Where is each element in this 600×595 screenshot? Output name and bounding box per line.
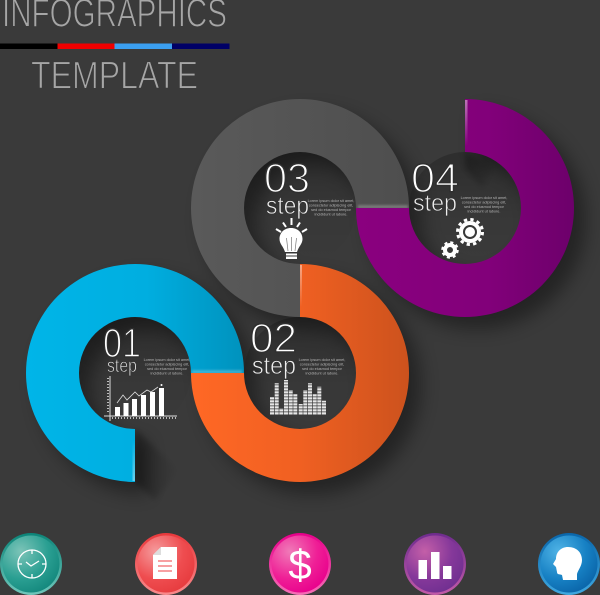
step 02 description: sed do eiusmod tempor xyxy=(302,367,343,371)
step 03 description: Lorem ipsum dolor sit amet, xyxy=(308,199,354,203)
ring 1: blue xyxy=(26,264,244,482)
step 02 label xyxy=(250,315,297,380)
step 03 description xyxy=(308,199,354,216)
ring 2: orange xyxy=(191,264,409,482)
button: head profile xyxy=(538,533,600,595)
step 04 label: 04 xyxy=(411,155,459,201)
step 03 description: consectetur adipiscing elit, xyxy=(309,204,353,208)
ring 3: grey xyxy=(191,99,409,317)
step 04 description: incididunt ut labore. xyxy=(468,210,500,214)
button: bar chart xyxy=(404,533,466,595)
hole shading xyxy=(79,152,521,429)
step 03 label: step xyxy=(266,192,309,220)
step 02 description: consectetur adipiscing elit, xyxy=(300,362,344,366)
step 01 label: 01 xyxy=(103,320,141,366)
step 01 description: sed do eiusmod tempor xyxy=(147,367,188,371)
step 04 description: sed do eiusmod tempor xyxy=(464,205,505,209)
step 01 description xyxy=(144,358,190,376)
step 02 description: incididunt ut labore. xyxy=(306,372,338,376)
step 01 description: incididunt ut labore. xyxy=(151,372,183,376)
icon: equalizer xyxy=(272,380,324,414)
step 02 label: step xyxy=(252,352,296,380)
step 01 label: step xyxy=(107,356,137,377)
step 04 label: step xyxy=(413,190,457,217)
ring shadows xyxy=(38,111,586,494)
step 01 description: Lorem ipsum dolor sit amet, xyxy=(144,358,190,362)
step 01 description: consectetur adipiscing elit, xyxy=(145,362,189,366)
step 04 description: consectetur adipiscing elit, xyxy=(462,200,506,204)
icon: gears xyxy=(442,220,482,258)
title: infographics template xyxy=(0,0,230,98)
step 02 description xyxy=(299,358,345,376)
step 03 description: incididunt ut labore. xyxy=(315,212,347,216)
step 04 description xyxy=(461,196,507,214)
step 02 description: Lorem ipsum dolor sit amet, xyxy=(299,358,345,362)
button: clock xyxy=(0,533,62,595)
title: infographics template: TEMPLATE xyxy=(31,54,198,98)
step 03 label: 03 xyxy=(264,155,310,201)
ring 4: purple xyxy=(356,99,574,317)
step 02 label: 02 xyxy=(250,315,297,361)
step 03 description: sed do eiusmod tempor xyxy=(311,208,352,212)
icon: light bulb xyxy=(276,218,307,259)
icon: bar chart with trend line xyxy=(104,376,177,421)
button: dollar: $ xyxy=(288,541,312,588)
step 01 label xyxy=(103,320,141,377)
cut-end long shadows xyxy=(135,152,495,500)
button: dollar xyxy=(269,533,331,595)
button: document xyxy=(135,533,197,595)
step 04 description: Lorem ipsum dolor sit amet, xyxy=(461,196,507,200)
